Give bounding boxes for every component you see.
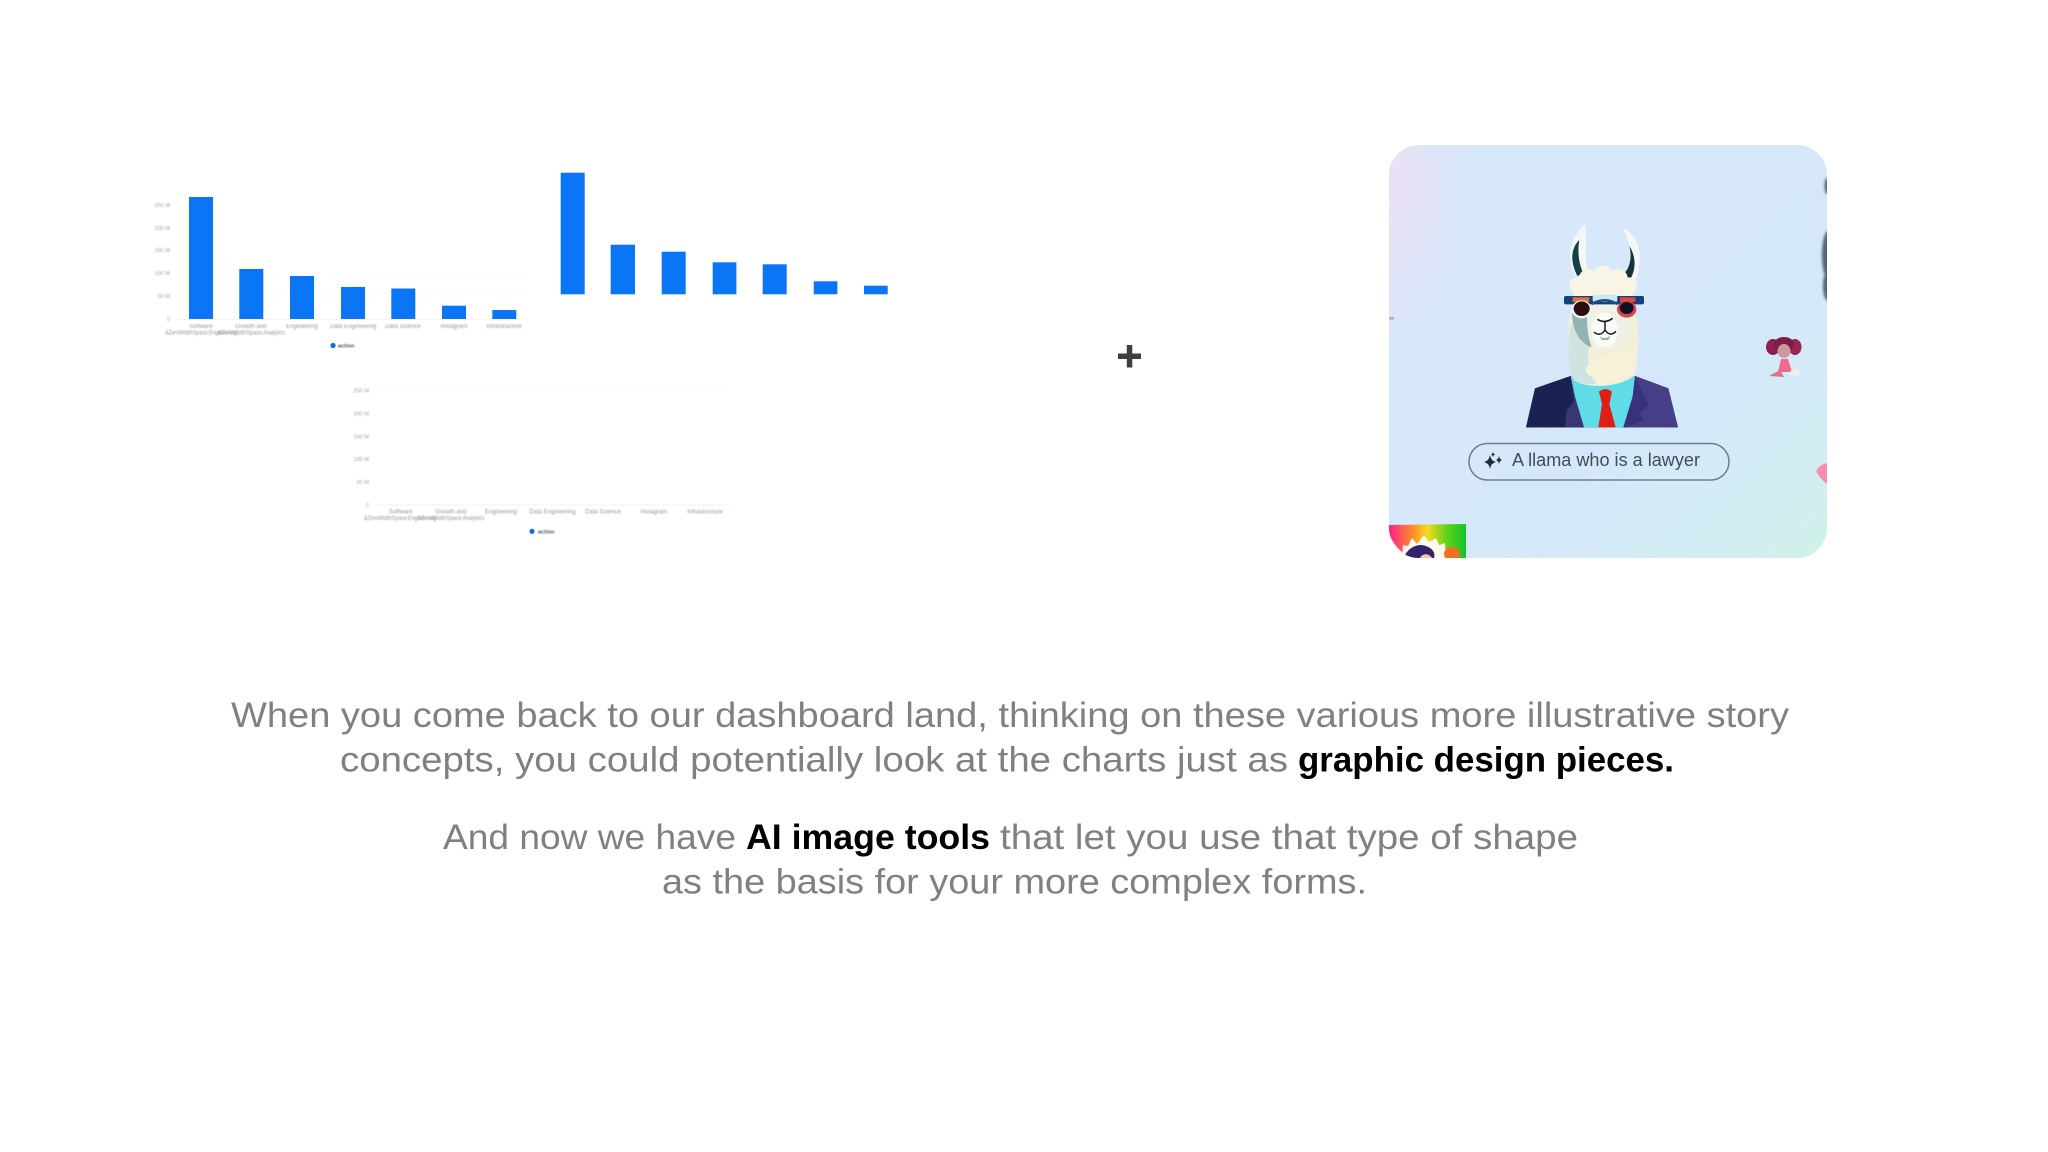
sunglasses (1564, 295, 1644, 318)
sticker: pink mark at left edge (1389, 317, 1394, 320)
y-axis labels: 200 M (154, 226, 170, 232)
y-axis labels (353, 389, 369, 509)
category labels: Data Science (385, 324, 422, 330)
neck wool (1568, 307, 1639, 386)
category labels: Infrastructure (687, 510, 723, 516)
y-axis labels (154, 203, 170, 323)
category labels: Data Engineering (330, 324, 376, 330)
prompt pill (1469, 444, 1729, 480)
bars (189, 197, 516, 319)
category labels: Data Engineering (529, 510, 576, 516)
y-axis labels: 250 M (154, 203, 170, 209)
shirt (1571, 377, 1635, 427)
category labels: Growth and (235, 324, 267, 330)
panel: AI image generator card (1389, 145, 1834, 561)
bars only chart (561, 173, 888, 294)
y-axis labels: 150 M (154, 248, 170, 254)
sticker: pink heart at right edge (1816, 463, 1827, 484)
text block: first paragraph (231, 696, 1790, 780)
sticker: dark blobs at right edge (1820, 176, 1827, 302)
sticker: small girl figure (1766, 337, 1802, 377)
text block: first paragraph: When you come back to our dashboard land, thinking on these various more illustrative story (231, 696, 1790, 735)
legend (330, 343, 355, 350)
text block: second paragraph: as the basis for your more complex forms. (662, 862, 1367, 902)
category labels: Engineering (485, 510, 517, 516)
face (1571, 304, 1634, 348)
category labels: Instagram (641, 510, 667, 516)
category labels: Software (189, 324, 213, 330)
category labels (165, 324, 522, 336)
ears (1570, 224, 1640, 279)
category labels: Data Science (585, 510, 622, 516)
y-axis labels: 0 (167, 317, 170, 323)
text block: first paragraph: graphic design pieces. (1298, 740, 1674, 780)
category labels: Growth and (435, 510, 467, 516)
forelock wool (1569, 266, 1637, 297)
prompt text: A llama who is a lawyer (1512, 449, 1700, 470)
y-axis labels: 250 M (353, 389, 369, 395)
text block: first paragraph: concepts, you could potentially look at the charts just as (340, 740, 1288, 780)
text block: second paragraph: And now we have (443, 818, 736, 857)
y-axis labels: 200 M (353, 412, 369, 418)
chest wool curls (1586, 365, 1592, 376)
legend: action (338, 344, 355, 350)
category labels: &ZeroWidthSpace;Engineering (165, 330, 237, 336)
legend (529, 529, 555, 535)
chart without bars: axes and labels only (353, 389, 730, 535)
bar chart: labelled chart with bars (154, 197, 527, 350)
sticker: rainbow corner tile (1389, 524, 1466, 561)
y-axis labels: 100 M (353, 457, 369, 463)
text block: second paragraph: that let you use that type of shape (1000, 818, 1578, 857)
suit jacket (1526, 376, 1678, 427)
category labels: Infrastructure (486, 324, 522, 330)
tie (1598, 389, 1616, 427)
text block: second paragraph (443, 818, 1578, 902)
lapels (1565, 376, 1648, 427)
legend: action (538, 529, 555, 535)
y-axis labels: 50 M (357, 480, 369, 486)
y-axis labels: 100 M (154, 271, 170, 277)
icon: sparkle (1484, 452, 1502, 469)
icon: plus sign (1118, 345, 1141, 368)
illustration: llama lawyer (1526, 224, 1678, 427)
y-axis labels: 50 M (158, 294, 170, 300)
text block: second paragraph: AI image tools (746, 818, 990, 857)
category labels: Software (389, 510, 413, 516)
category labels: &ZeroWidthSpace;Engineering (364, 516, 436, 522)
category labels (364, 510, 723, 522)
category labels: &ZeroWidthSpace;Analytics (218, 330, 285, 336)
category labels: Engineering (286, 324, 318, 330)
y-axis labels: 0 (366, 503, 369, 509)
category labels: Instagram (441, 324, 467, 330)
y-axis labels: 150 M (353, 434, 369, 440)
category labels: &ZeroWidthSpace;Analytics (418, 516, 484, 522)
